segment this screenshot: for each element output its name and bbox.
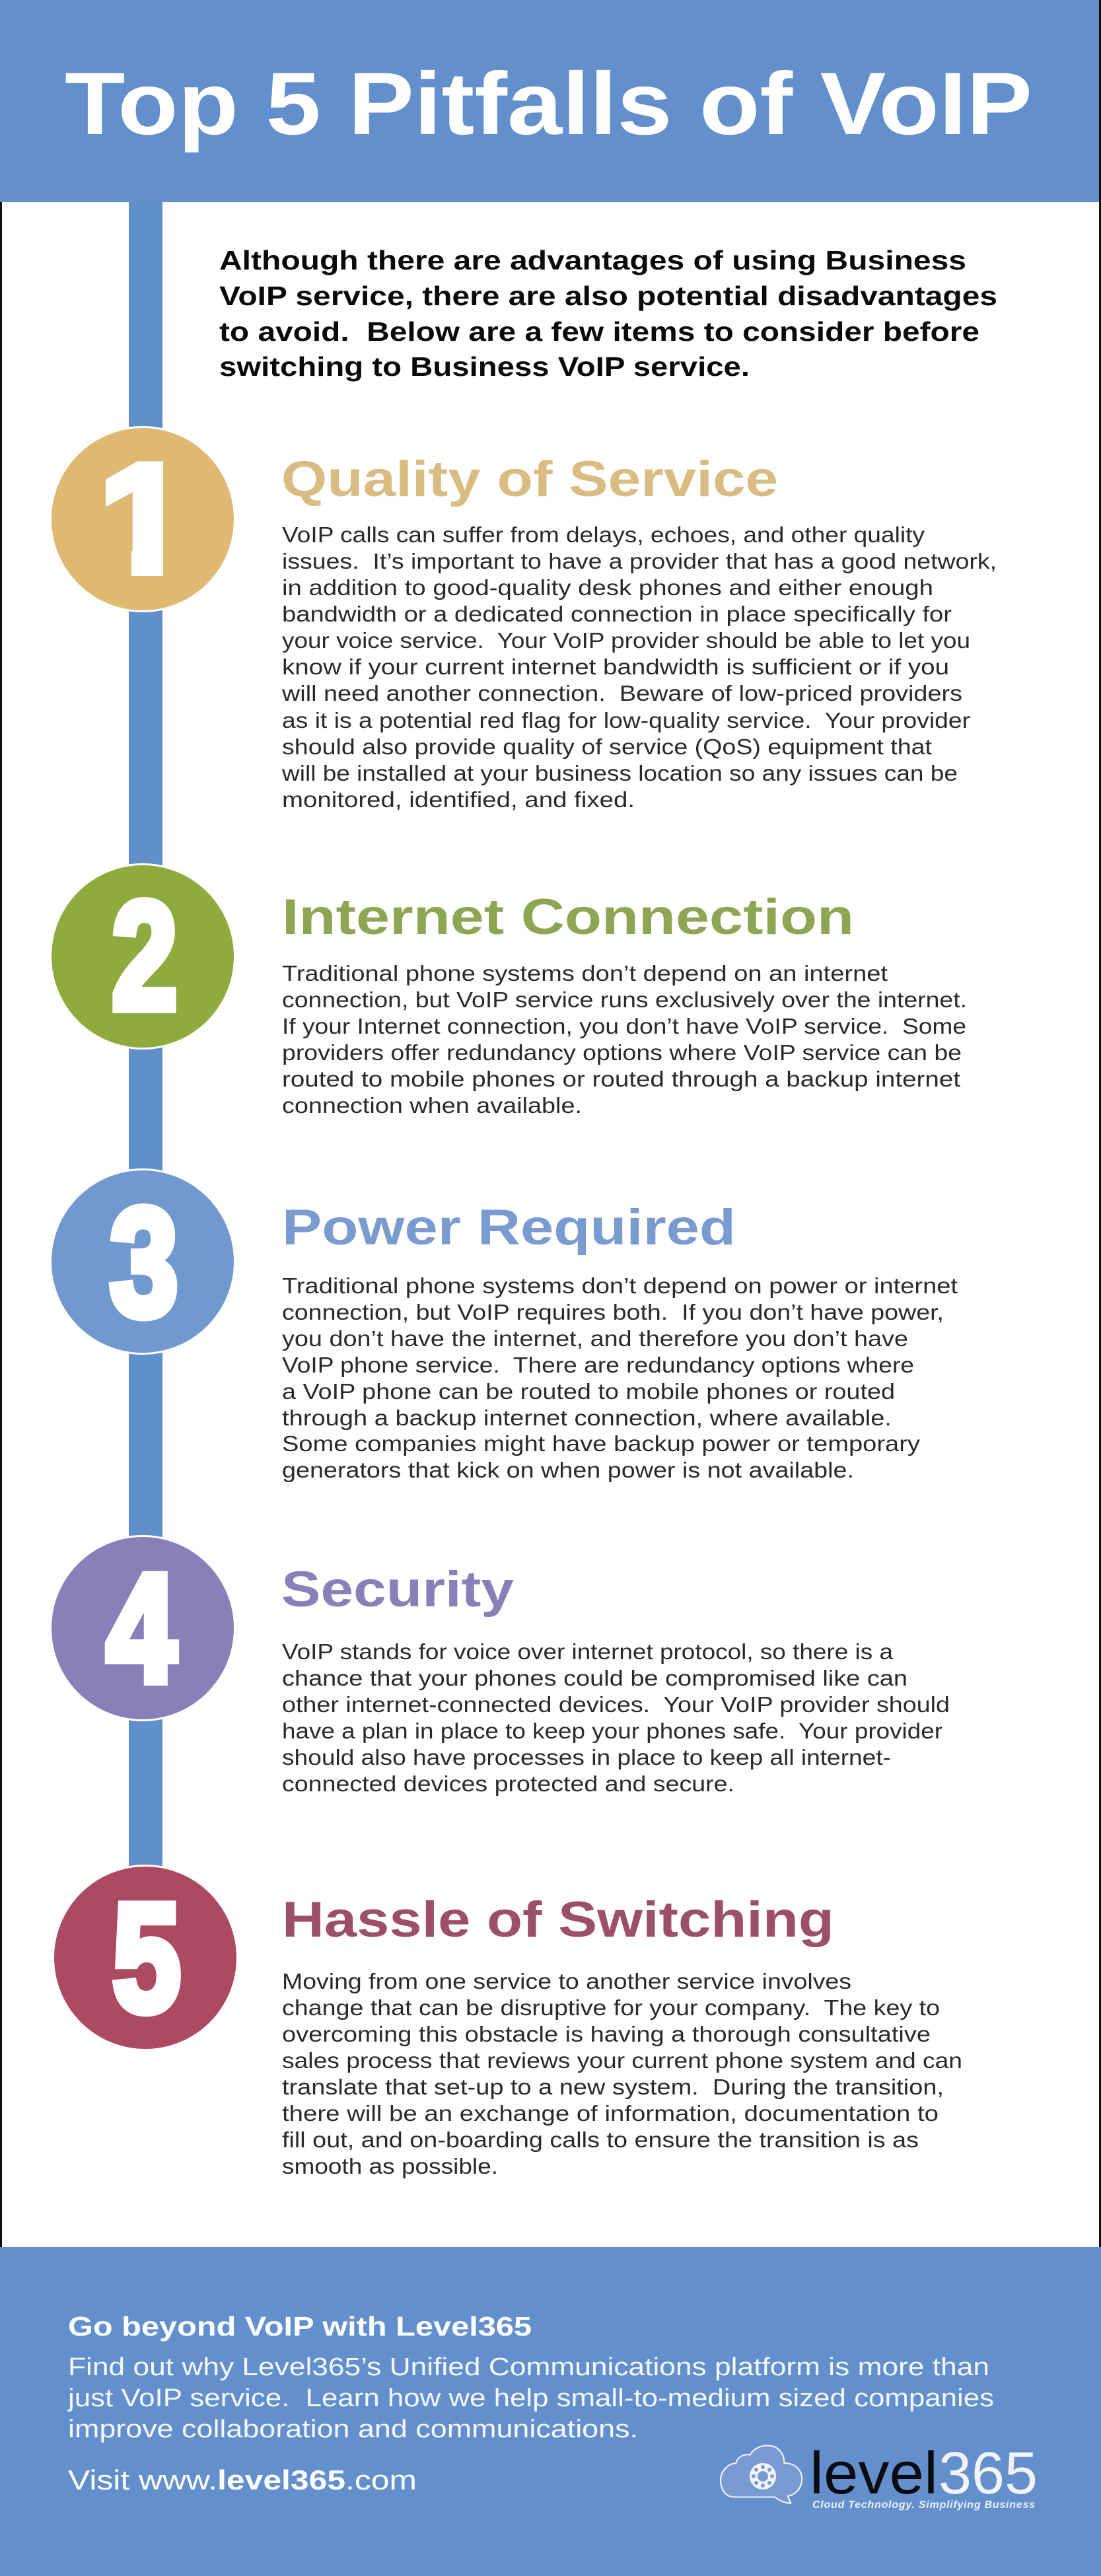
footer link: Visit www. level365 .com [68, 2464, 417, 2495]
text: quality of service body: monitored, identified, and fixed. [282, 787, 635, 812]
footer text: Find out why Level365’s Unified Communications platform is more than [68, 2353, 989, 2381]
intro text: Although there are advantages of using Business [219, 245, 966, 275]
text: hassle of switching body: there will be an exchange of information, documentation to [282, 2101, 939, 2126]
text: internet connection body: Traditional phone systems don’t depend on an internet [282, 961, 888, 985]
footer heading: Go beyond VoIP with Level365 [68, 2311, 532, 2342]
text: security body: connected devices protected and secure. [282, 1771, 734, 1796]
text: power required body: Traditional phone systems don’t depend on power or internet [282, 1273, 958, 1298]
text: power required body: you don’t have the internet, and therefore you don’t have [282, 1326, 908, 1351]
text: internet connection body: connection when available. [282, 1093, 582, 1118]
heading: security: Security [281, 1561, 514, 1618]
text: hassle of switching body: translate that set-up to a new system. During the transition, [282, 2075, 944, 2099]
text: internet connection body: providers offer redundancy options where VoIP service can be [282, 1040, 962, 1065]
text: quality of service body: bandwidth or a dedicated connection in place specifically for [282, 602, 952, 626]
text: power required body: a VoIP phone can be routed to mobile phones or routed [282, 1379, 895, 1404]
text: quality of service body: know if your current internet bandwidth is sufficient or if you [282, 655, 949, 679]
footer panel [0, 2247, 1101, 2576]
intro text [219, 245, 997, 382]
text: quality of service body: VoIP calls can suffer from delays, echoes, and other quality [282, 522, 925, 547]
panel: pitfall 5 hassle of switching [52, 1865, 962, 2178]
text: power required body: VoIP phone service. There are redundancy options where [282, 1353, 914, 1377]
timeline bar [129, 202, 162, 1873]
text: security body [282, 1639, 950, 1796]
text: quality of service body: your voice service. Your VoIP provider should be able to let you [282, 628, 970, 653]
heading: power required: Power Required [282, 1199, 736, 1256]
icon: number 1 badge [50, 426, 236, 612]
heading: internet connection: Internet Connection [282, 889, 854, 945]
footer text: improve collaboration and communications. [68, 2415, 638, 2443]
icon: number 1 badge: 1 [97, 433, 194, 604]
text: quality of service body: in addition to good-quality desk phones and either enough [282, 575, 933, 600]
panel: pitfall 3 power required [50, 1168, 958, 1482]
logo tagline: Cloud Technology. Simplifying Business [812, 2499, 1035, 2511]
text: internet connection body: routed to mobile phones or routed through a backup internet [282, 1067, 960, 1091]
footer text [67, 2353, 994, 2443]
text: power required body: connection, but VoIP requires both. If you don’t have power, [282, 1300, 944, 1324]
text: security body: should also have processes in place to keep all internet- [282, 1745, 891, 1770]
header banner [0, 0, 1099, 202]
icon: number 3 badge: 3 [110, 1177, 178, 1348]
icon: cloud with phone dial [721, 2445, 802, 2503]
logo: level365 [721, 2441, 1038, 2511]
intro text: VoIP service, there are also potential disadvantages [219, 281, 997, 311]
icon: number 4 badge [50, 1535, 236, 1721]
text: hassle of switching body: sales process that reviews your current phone system and can [282, 2048, 962, 2073]
icon: number 3 badge [50, 1168, 236, 1355]
text: power required body: Some companies might have backup power or temporary [282, 1431, 921, 1456]
intro text: to avoid. Below are a few items to consider before [219, 316, 979, 347]
text: hassle of switching body: smooth as possible. [282, 2154, 498, 2178]
icon: number 2 badge [50, 863, 236, 1050]
text: hassle of switching body: Moving from one service to another service involves [282, 1969, 851, 1993]
text: internet connection body [282, 961, 967, 1118]
text: security body: other internet-connected devices. Your VoIP provider should [282, 1692, 950, 1717]
text: hassle of switching body: change that can be disruptive for your company. The key to [282, 1995, 940, 2020]
intro text: switching to Business VoIP service. [219, 351, 750, 382]
panel: pitfall 4 security [50, 1535, 950, 1796]
icon: number 5 badge [52, 1865, 238, 2051]
heading: quality of service: Quality of Service [281, 451, 778, 507]
text: security body: VoIP stands for voice over internet protocol, so there is a [282, 1639, 894, 1664]
text: power required body [282, 1273, 958, 1482]
panel: pitfall 1 quality of service [50, 426, 997, 812]
logo wordmark: level [810, 2441, 938, 2507]
text: hassle of switching body: fill out, and on-boarding calls to ensure the transition is as [282, 2128, 919, 2152]
text: internet connection body: connection, but VoIP service runs exclusively over the internet. [282, 987, 967, 1012]
panel: pitfall 2 internet connection [50, 863, 967, 1118]
text: hassle of switching body: overcoming this obstacle is having a thorough consultative [282, 2022, 931, 2046]
text: quality of service body: issues. It’s important to have a provider that has a good network, [282, 549, 997, 573]
logo: level365: 365 [939, 2441, 1038, 2507]
text: power required body: through a backup internet connection, where available. [282, 1406, 892, 1430]
icon: number 5 badge: 5 [112, 1873, 181, 2044]
text: quality of service body: will be installed at your business location so any issues can be [281, 761, 958, 785]
text: security body: have a plan in place to keep your phones safe. Your provider [282, 1719, 942, 1743]
icon: number 2 badge: 2 [112, 871, 177, 1042]
text: hassle of switching body [282, 1969, 962, 2178]
text: power required body: generators that kick on when power is not available. [282, 1458, 854, 1482]
text: quality of service body: as it is a potential red flag for low-quality service. Your provider [282, 708, 970, 733]
icon: number 4 badge: 4 [107, 1543, 176, 1714]
text: quality of service body [281, 522, 997, 812]
text: security body: chance that your phones could be compromised like can [282, 1666, 907, 1690]
text: quality of service body: will need another connection. Beware of low-priced providers [281, 681, 962, 705]
text: quality of service body: should also provide quality of service (QoS) equipment that [282, 734, 932, 759]
footer text: just VoIP service. Learn how we help small-to-medium sized companies [67, 2384, 994, 2412]
text: internet connection body: If your Internet connection, you don’t have VoIP service. Some [282, 1014, 966, 1038]
heading: hassle of switching: Hassle of Switching [282, 1892, 834, 1948]
title: Top 5 Pitfalls of VoIP [65, 55, 1032, 153]
